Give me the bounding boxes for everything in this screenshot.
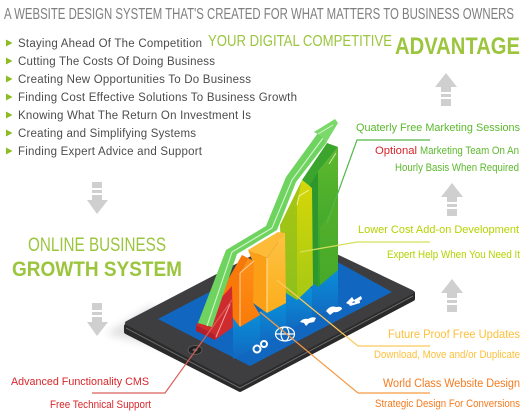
- benefit 2: Cutting The Costs Of Doing Business: [18, 56, 215, 68]
- leader line: red: [92, 300, 232, 393]
- tablet shadow: [106, 306, 200, 352]
- heading: online business growth system: [12, 235, 182, 281]
- callout: marketing: [356, 122, 520, 174]
- benefits list: [6, 38, 297, 158]
- leader line: green: [327, 140, 430, 223]
- heading: online business growth system: ONLINE BUSINESS: [28, 235, 166, 256]
- benefit 7: Finding Expert Advice and Support: [18, 146, 203, 158]
- growth arrow: [198, 119, 338, 327]
- callout: updates: [374, 327, 520, 361]
- callout: development: Lower Cost Add-on Development: [358, 224, 519, 236]
- benefit 4: Finding Cost Effective Solutions To Business Growth: [18, 92, 297, 104]
- benefit 1: Staying Ahead Of The Competition: [18, 38, 202, 50]
- icon: cloud: [300, 317, 316, 326]
- bar: green: [302, 143, 338, 287]
- tablet body face: [127, 236, 412, 383]
- bar: orange: [222, 255, 260, 327]
- tablet home button: [188, 346, 202, 354]
- heading: online business growth system: GROWTH SYSTEM: [12, 258, 182, 281]
- callout: cms: Advanced Functionality CMS: [11, 376, 149, 388]
- callout: marketing: Quaterly Free Marketing Sessions: [356, 122, 520, 134]
- bar chart: [196, 119, 338, 340]
- bar: yellow green: [280, 180, 313, 300]
- leader line: amber: [277, 280, 430, 346]
- leader line: orange: [260, 312, 430, 393]
- bar: red: [196, 286, 233, 340]
- benefit 6: Creating and Simplifying Systems: [18, 128, 196, 140]
- callout: cms: [11, 376, 151, 411]
- callout: website design: World Class Website Design: [383, 378, 520, 390]
- icon: speech: [326, 306, 342, 315]
- tablet body edge: [126, 293, 413, 390]
- icon: up arrow lower: [441, 279, 463, 312]
- heading: your digital competitive advantage: [208, 33, 520, 60]
- screen icon columns: [233, 268, 338, 359]
- bar: amber: [248, 232, 286, 313]
- screen icons: [254, 296, 362, 352]
- icon: up arrow middle: [441, 183, 463, 216]
- benefit 5: Knowing What The Return On Investment Is: [18, 110, 251, 122]
- callout: marketing: Marketing Team On An: [420, 145, 519, 157]
- tablet: [106, 236, 413, 390]
- callout: cms: Free Technical Support: [50, 399, 151, 411]
- tablet screen: [158, 243, 392, 366]
- heading: your digital competitive advantage: YOUR DIGITAL COMPETITIVE: [208, 33, 392, 50]
- icon: tools: [346, 296, 362, 306]
- callout: development: [358, 224, 520, 261]
- tablet rim highlight: [126, 296, 413, 388]
- callout: updates: Future Proof Free Updates: [388, 327, 520, 341]
- icon: up arrow top: [435, 73, 457, 106]
- callout: marketing: Optional: [375, 145, 417, 157]
- benefit 3: Creating New Opportunities To Do Business: [18, 74, 251, 86]
- icon: gears: [254, 341, 267, 352]
- icon: down arrow upper: [87, 182, 108, 214]
- callout: website design: [375, 378, 520, 410]
- leader line: lime: [300, 242, 430, 252]
- icon: globe: [276, 327, 294, 341]
- icon: down arrow lower: [87, 303, 108, 336]
